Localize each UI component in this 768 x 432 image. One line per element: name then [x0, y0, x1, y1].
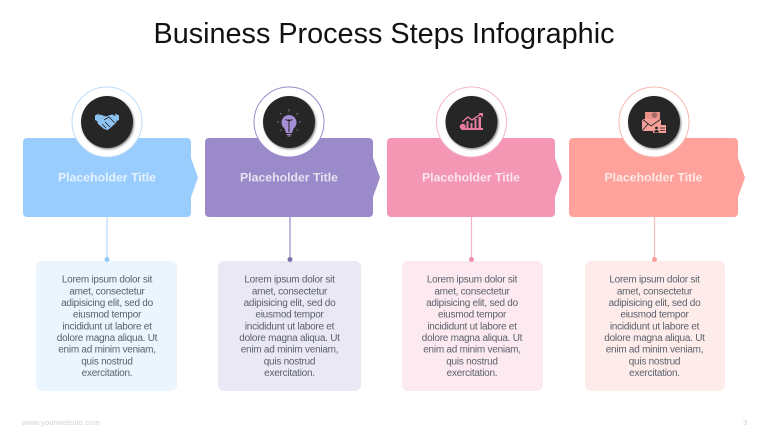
banner title 2: Placeholder Title [240, 170, 338, 184]
icon badge 2: light bulb [254, 87, 324, 157]
step 1 [23, 87, 198, 391]
description text 2: exercitation. [264, 368, 315, 379]
description text 3: exercitation. [447, 368, 497, 379]
icon badge 3: growth chart [436, 87, 506, 157]
description card 3 [402, 261, 543, 391]
connector line 2 [288, 217, 292, 262]
banner 1 [23, 138, 198, 217]
description text 3: quis nostrud [446, 356, 498, 367]
description text 2: dolore magna aliqua. Ut [239, 333, 340, 344]
description text 1: adipisicing elit, sed do [61, 298, 154, 309]
description text 2: incididunt ut labore et [245, 321, 335, 332]
description text 3: enim ad minim veniam, [423, 345, 521, 356]
footer website: www.yourwebsite.com [21, 418, 100, 427]
description text 4: Lorem ipsum dolor sit [609, 274, 700, 286]
banner title 3: Placeholder Title [422, 170, 520, 184]
description text 1: dolore magna aliqua. Ut [57, 333, 158, 344]
description text 3: eiusmod tempor [438, 310, 507, 321]
description text 2: amet, consectetur [252, 286, 328, 297]
step 2 [205, 87, 380, 391]
description text 1: enim ad minim veniam, [58, 345, 156, 356]
description text 4: eiusmod tempor [620, 310, 690, 321]
description text 1: exercitation. [82, 368, 132, 379]
connector line 1 [104, 217, 110, 262]
description text 1: eiusmod tempor [73, 310, 142, 321]
description text 2: adipisicing elit, sed do [244, 298, 336, 309]
description text 2: quis nostrud [264, 356, 315, 367]
description text 3: incididunt ut labore et [427, 321, 517, 332]
description text 2: Lorem ipsum dolor sit [244, 274, 335, 286]
description text 1 [57, 274, 158, 379]
banner 4 [569, 138, 745, 217]
description text 1: Lorem ipsum dolor sit [62, 274, 153, 286]
description text 2: enim ad minim veniam, [241, 345, 338, 356]
description text 4: dolore magna aliqua. Ut [604, 333, 705, 344]
description card 2 [218, 261, 361, 391]
description card 4 [585, 261, 725, 391]
description text 4: incididunt ut labore et [610, 321, 700, 332]
description text 1: quis nostrud [81, 356, 133, 367]
banner 2 [205, 138, 380, 217]
footer page number: 3 [743, 418, 747, 427]
description text 2: eiusmod tempor [255, 310, 325, 321]
description text 1: incididunt ut labore et [62, 321, 152, 332]
description text 4: amet, consectetur [617, 286, 693, 297]
description text 1: amet, consectetur [69, 286, 146, 297]
step 3 [387, 87, 562, 391]
description text 4: quis nostrud [629, 356, 680, 367]
step 4 [569, 87, 745, 391]
icon badge 4: mail and contact card [619, 87, 689, 157]
description text 3: dolore magna aliqua. Ut [422, 333, 523, 344]
connector line 3 [469, 217, 474, 262]
description text 3 [422, 274, 523, 379]
banner 3 [387, 138, 562, 217]
description text 4: enim ad minim veniam, [606, 345, 703, 356]
description text 2 [239, 274, 340, 379]
description card 1 [36, 261, 177, 391]
banner title 1: Placeholder Title [58, 170, 156, 184]
description text 4: exercitation. [629, 368, 680, 379]
description text 4: adipisicing elit, sed do [609, 298, 701, 309]
icon badge 1: handshake [72, 87, 142, 157]
description text 3: adipisicing elit, sed do [426, 298, 519, 309]
title: Business Process Steps Infographic [154, 18, 614, 50]
banner title 4: Placeholder Title [604, 170, 703, 184]
connector line 4 [652, 217, 657, 262]
description text 4 [604, 274, 705, 379]
description text 3: amet, consectetur [434, 286, 511, 297]
description text 3: Lorem ipsum dolor sit [427, 274, 518, 286]
